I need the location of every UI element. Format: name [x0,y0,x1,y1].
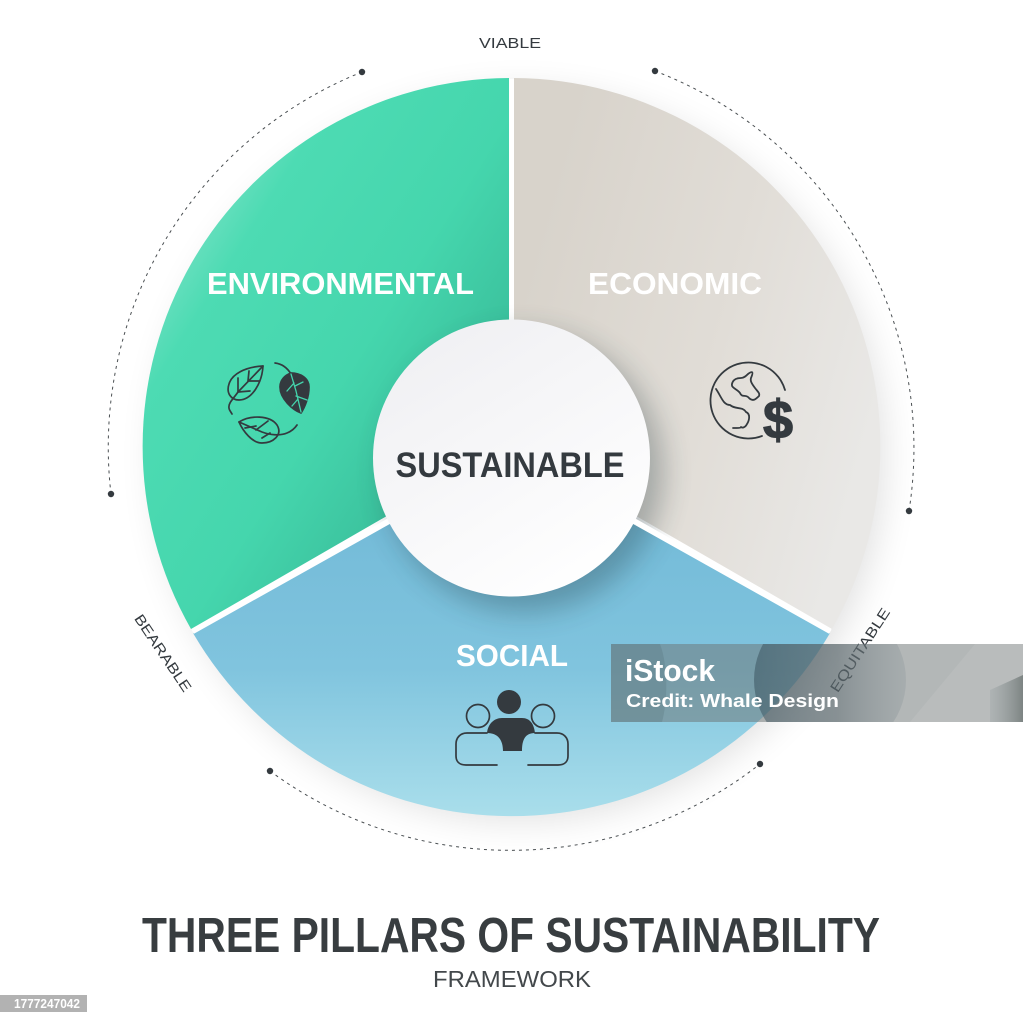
watermark band [611,644,1023,722]
segment: environmental [143,78,509,629]
pie chart: three pillars [143,78,880,816]
label: economic: ECONOMIC [588,267,762,301]
centre circle: sustainable: SUSTAINABLE [396,446,624,485]
hub shadow [191,320,832,634]
watermark credit: Credit: Whale Design [626,690,839,711]
title: THREE PILLARS OF SUSTAINABILITY [142,909,880,963]
dashed arc: right [652,68,914,514]
subtitle: FRAMEWORK [433,966,592,992]
icon: group of people [456,690,568,765]
icon: three leaves [228,363,309,443]
stock image id tag: 1777247042 [14,996,80,1011]
icon: globe with dollar [710,362,793,450]
dashed arc: bottom [267,761,763,850]
disc drop shadow [156,92,884,820]
centre circle: sustainable [373,320,650,596]
label: bearable: BEARABLE [130,612,194,696]
watermark logo: iStock [625,653,716,688]
segment: economic [514,78,880,629]
icon glyph: dollar sign: $ [763,390,793,450]
label: environmental: ENVIRONMENTAL [207,267,474,301]
label: social: SOCIAL [456,639,568,673]
segment: social [193,451,830,816]
dashed arc: left [108,69,365,497]
label: equitable: EQUITABLE [828,605,894,696]
label: viable: VIABLE [479,36,541,52]
